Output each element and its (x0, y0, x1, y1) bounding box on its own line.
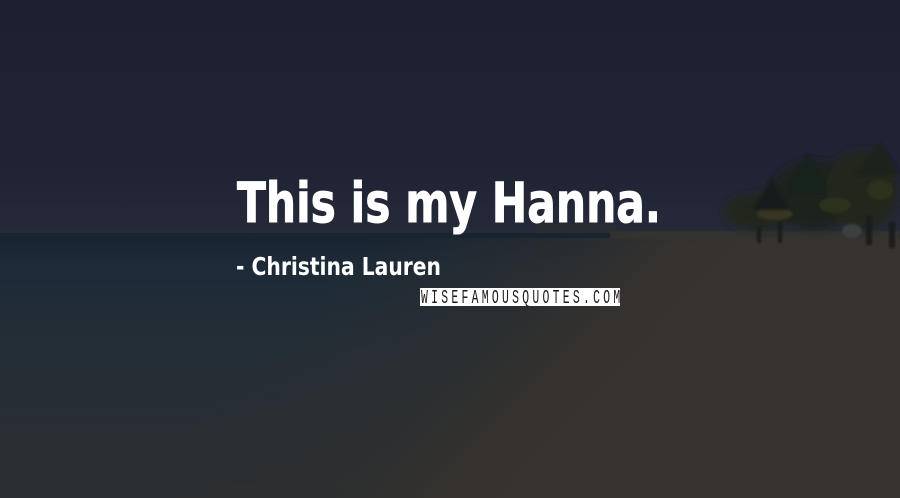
title: This is my Hanna. (237, 171, 661, 235)
sand beach (0, 238, 900, 498)
palm trees (724, 142, 899, 248)
author attribution: - Christina Lauren (236, 252, 441, 281)
watermark badge: WISEFAMOUSQUOTES.COM (421, 287, 620, 309)
sky (0, 0, 900, 234)
sea (0, 233, 900, 498)
distant shoreline (536, 225, 900, 239)
